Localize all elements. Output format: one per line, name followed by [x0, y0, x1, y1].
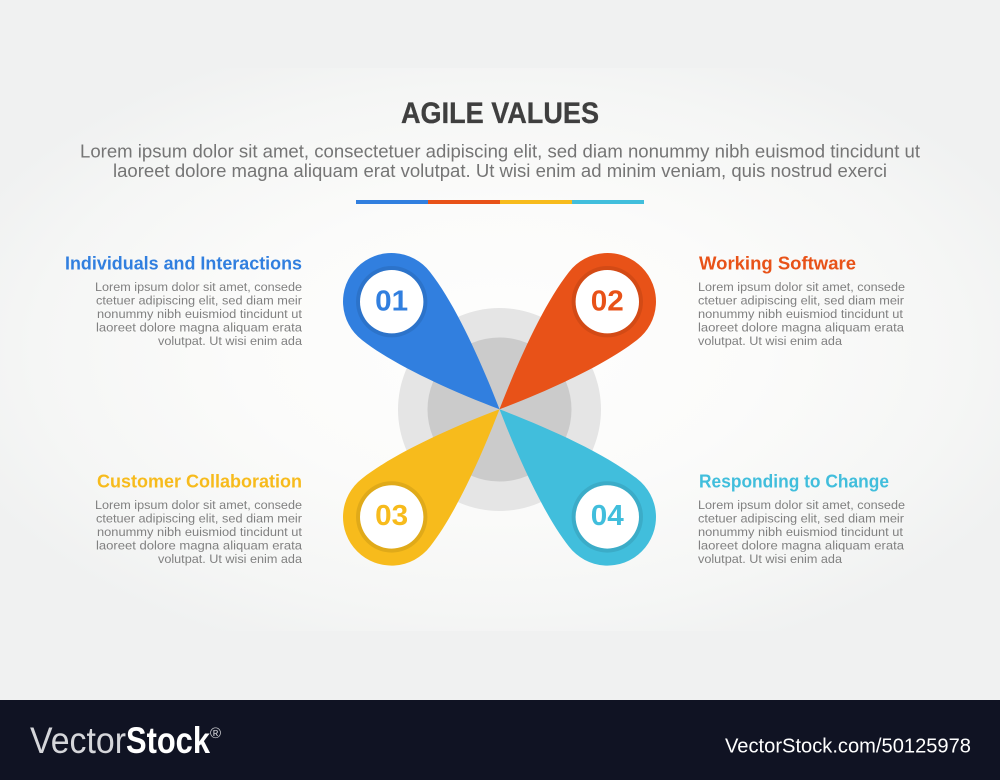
petal 01: blue [343, 253, 500, 409]
footer band [0, 700, 1000, 780]
block 02: Working Software: ctetuer adipiscing elit, sed diam meir [698, 294, 904, 308]
block 02: Working Software: nonummy nibh euismiod tincidunt ut [698, 307, 904, 321]
footer logo: ® [210, 725, 221, 742]
petal 03: yellow: 03 [375, 500, 408, 532]
block 03: Customer Collaboration: volutpat. Ut wisi enim ada [158, 552, 302, 566]
block 03: Customer Collaboration: Lorem ipsum dolor sit amet, consede [95, 498, 302, 512]
block 01: Individuals and Interactions: laoreet dolore magna aliquam erata [96, 320, 302, 334]
block 04: Responding to Change: Lorem ipsum dolor sit amet, consede [698, 498, 905, 512]
block 04: Responding to Change: volutpat. Ut wisi enim ada [698, 552, 842, 566]
block 01: Individuals and Interactions: nonummy nibh euismiod tincidunt ut [97, 307, 303, 321]
petal 04: light blue [500, 409, 656, 566]
block 03: Customer Collaboration: Customer Collaboration [97, 470, 302, 492]
block 01: Individuals and Interactions [65, 252, 303, 348]
subtitle text block: Lorem ipsum dolor sit amet, consectetuer adipiscing elit, sed diam nonummy nibh euismod tincidunt ut [80, 142, 920, 162]
block 04: Responding to Change [698, 470, 905, 566]
four colour divider bar [356, 200, 644, 204]
block 04: Responding to Change: Responding to Change [699, 470, 889, 492]
block 03: Customer Collaboration [95, 470, 303, 566]
footer logo: Vector [30, 720, 126, 761]
block 03: Customer Collaboration: nonummy nibh euismiod tincidunt ut [97, 525, 303, 539]
block 02: Working Software [698, 252, 905, 348]
footer image id: VectorStock.com/50125978 [725, 734, 971, 758]
block 01: Individuals and Interactions: Individuals and Interactions [65, 252, 302, 274]
subtitle text block [80, 142, 920, 181]
block 02: Working Software: volutpat. Ut wisi enim ada [698, 334, 842, 348]
footer logo: Stock [126, 720, 210, 761]
petal 04: light blue: 04 [591, 500, 624, 532]
petal 01: blue: 01 [375, 286, 408, 318]
footer logo [30, 720, 221, 761]
block 01: Individuals and Interactions: volutpat. Ut wisi enim ada [158, 334, 302, 348]
subtitle text block: laoreet dolore magna aliquam erat volutpat. Ut wisi enim ad minim veniam, quis nostrud exerci [113, 161, 887, 181]
block 02: Working Software: Working Software [699, 252, 856, 274]
block 03: Customer Collaboration: ctetuer adipiscing elit, sed diam meir [96, 512, 302, 526]
block 03: Customer Collaboration: laoreet dolore magna aliquam erata [96, 538, 302, 552]
title: AGILE VALUES [401, 97, 599, 130]
concentric centre circles [398, 308, 601, 511]
block 02: Working Software: laoreet dolore magna aliquam erata [698, 320, 904, 334]
petal 02: orange: 02 [591, 286, 624, 318]
block 01: Individuals and Interactions: ctetuer adipiscing elit, sed diam meir [96, 294, 302, 308]
block 04: Responding to Change: nonummy nibh euismiod tincidunt ut [698, 525, 904, 539]
block 04: Responding to Change: laoreet dolore magna aliquam erata [698, 538, 904, 552]
block 04: Responding to Change: ctetuer adipiscing elit, sed diam meir [698, 512, 904, 526]
petal 03: yellow [343, 409, 500, 566]
block 02: Working Software: Lorem ipsum dolor sit amet, consede [698, 280, 905, 294]
petal 02: orange [500, 253, 656, 409]
block 01: Individuals and Interactions: Lorem ipsum dolor sit amet, consede [95, 280, 302, 294]
